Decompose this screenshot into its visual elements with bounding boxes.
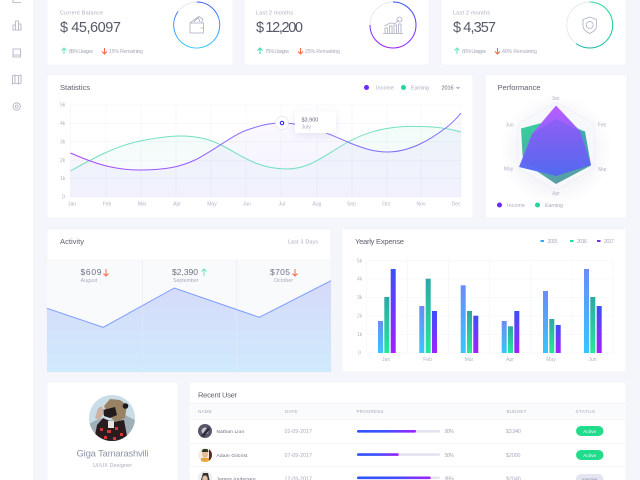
row: james andersen: [198, 471, 604, 480]
x axis labels: May: [207, 202, 217, 208]
income area: [70, 113, 461, 197]
x axis labels: [68, 202, 461, 208]
status pill: Active: [583, 453, 597, 458]
usage stats: 85% Usages: [69, 49, 93, 55]
row: nathan lion: 02-09-2017: [284, 429, 312, 435]
bars: jan: [378, 269, 396, 353]
status pill: [576, 426, 604, 436]
earning area: [70, 126, 461, 197]
revenue value: $ 12,200: [256, 20, 303, 36]
legend: [364, 85, 429, 92]
radar labels: Jan: [551, 96, 560, 102]
icon: book: [13, 49, 20, 57]
stat: september: [172, 267, 206, 284]
x axis labels: Aug: [313, 202, 322, 208]
x axis labels: Jul: [279, 202, 285, 208]
range label: Last 3 Days: [288, 240, 318, 246]
progress bar 90%: [357, 430, 440, 433]
panel: activity: [47, 229, 331, 372]
year selector: 2016: [442, 86, 454, 92]
x axis labels: Oct: [382, 202, 390, 208]
bars: feb: [419, 279, 437, 353]
row: nathan lion: [198, 424, 604, 438]
legend: 2016: [577, 239, 587, 245]
table header: NAME: [198, 409, 212, 414]
status pill: [576, 474, 604, 480]
year selector: [442, 86, 460, 92]
x axis labels: Apr: [173, 202, 181, 208]
balance value: $ 45,6097: [60, 20, 121, 36]
usage stats: [258, 48, 340, 55]
y axis labels: 3k: [60, 140, 66, 146]
profile photo: [89, 395, 135, 441]
bars: may: [543, 291, 561, 353]
row: adam gilcrist: $2000: [506, 453, 521, 459]
usage stats: 15% Remaining: [109, 49, 143, 55]
heading: performance: Performance: [498, 83, 540, 92]
bar chart: [357, 258, 613, 363]
y axis labels: 4k: [60, 121, 66, 127]
table header: STATUS: [576, 409, 596, 414]
x axis labels: Apr: [506, 357, 514, 363]
avatar: [198, 424, 212, 438]
x axis labels: Sep: [347, 202, 356, 208]
radar labels: Jun: [505, 122, 514, 128]
y axis labels: 2k: [357, 314, 363, 320]
x axis labels: Jun: [243, 202, 251, 208]
x axis labels: Nov: [417, 202, 426, 208]
panel: recent user table: [189, 382, 626, 480]
savings label: Last 2 months: [453, 10, 490, 16]
x axis labels: Feb: [423, 357, 432, 363]
row: nathan lion: Nathan Lion: [216, 429, 244, 435]
y axis labels: 1k: [357, 332, 363, 338]
line chart: [60, 102, 461, 208]
progress ring 85% with wallet icon: [174, 2, 220, 48]
sidebar: [0, 0, 33, 480]
y axis labels: 4k: [357, 276, 363, 282]
radar labels: May: [504, 166, 514, 172]
icon: map: [12, 75, 21, 84]
panel: statistics: [47, 75, 473, 218]
usage stats: [454, 48, 537, 55]
tooltip: [295, 112, 336, 133]
y axis labels: 1k: [60, 176, 66, 182]
earning polygon: [521, 119, 591, 184]
legend: [497, 202, 563, 209]
x axis labels: Dec: [452, 202, 461, 208]
savings value: $ 4,357: [453, 20, 496, 36]
usage stats: [62, 48, 143, 55]
stat: august: $609: [80, 267, 102, 277]
panel: last 2 months savings: [441, 0, 626, 65]
income polygon: [519, 106, 591, 176]
area chart: [47, 260, 331, 372]
radar labels: [504, 96, 607, 197]
y axis labels: [357, 258, 363, 356]
x axis labels: Jan: [382, 357, 390, 363]
legend: 2017: [604, 239, 614, 245]
y axis labels: 0: [62, 194, 65, 200]
heading: yearly expense: Yearly Expense: [355, 237, 404, 246]
data point marker: [276, 116, 288, 130]
bars: mar: [461, 285, 478, 353]
revenue label: Last 2 months: [256, 10, 293, 16]
profile name: Giga Tamarashvili: [76, 448, 148, 460]
row: adam gilcrist: 50%: [444, 453, 454, 459]
income line: [70, 113, 461, 170]
heading: recent user: Recent User: [198, 390, 237, 400]
tooltip: $3,900: [302, 118, 318, 124]
y axis labels: 5k: [60, 102, 66, 108]
radar chart: [500, 94, 612, 206]
avatar: [198, 471, 212, 480]
x axis labels: Jun: [588, 357, 597, 363]
x axis labels: Mar: [138, 202, 147, 208]
panel: yearly expense: [342, 229, 626, 372]
legend: Income: [376, 86, 394, 92]
y axis labels: 0: [358, 350, 361, 356]
y axis labels: 2k: [60, 158, 66, 164]
radar labels: Feb: [598, 122, 607, 128]
profile role: UI/UX Designer: [93, 463, 132, 469]
earning line: [70, 126, 461, 171]
row: adam gilcrist: [198, 448, 604, 462]
x axis labels: Mar: [465, 357, 474, 363]
stat: september: $2,390: [172, 267, 198, 277]
y axis labels: 3k: [357, 295, 363, 301]
bars: jun: [584, 269, 602, 353]
bars: apr: [502, 311, 519, 353]
avatar: [198, 448, 213, 462]
table header: PROGRESS: [356, 409, 384, 414]
legend: 2015: [548, 239, 558, 245]
heading: activity: Activity: [60, 237, 84, 246]
usage stats: 40% Remaining: [502, 49, 537, 55]
x axis labels: May: [546, 357, 556, 363]
panel: profile: [47, 382, 178, 480]
legend: [540, 239, 614, 245]
stat: october: [270, 267, 298, 284]
radar labels: Mar: [598, 167, 607, 173]
balance label: Current Balance: [60, 10, 103, 16]
radar labels: Apr: [552, 191, 560, 197]
progress bar 50%: [357, 453, 440, 456]
progress ring 60% with shield icon: [567, 2, 613, 48]
x axis labels: [382, 357, 597, 363]
stat: september: September: [173, 278, 199, 284]
stat: august: [80, 267, 108, 284]
row: adam gilcrist: Adam Gilcrist: [216, 453, 248, 459]
legend: Earning: [411, 86, 429, 92]
icon: line chart: [13, 0, 21, 2]
status pill: Active: [583, 429, 597, 434]
stat: august: August: [80, 278, 98, 284]
stat: october: October: [274, 278, 293, 284]
usage stats: 25% Remaining: [305, 49, 340, 55]
row: nathan lion: 90%: [444, 429, 454, 435]
table header: DATE: [285, 409, 298, 414]
panel: performance: [485, 75, 627, 218]
stat: october: $705: [270, 267, 290, 277]
y axis labels: 5k: [357, 258, 363, 264]
y axis labels: [60, 102, 66, 200]
tooltip: July: [302, 124, 311, 130]
table header: [189, 403, 626, 467]
progress ring 75% with growth icon: [370, 2, 416, 48]
progress bar 95%: [357, 476, 440, 479]
status pill: [576, 450, 604, 460]
table header: BUDGET: [506, 409, 527, 414]
usage stats: 60% Usages: [462, 49, 486, 55]
row: nathan lion: $3,940: [506, 429, 521, 435]
panel: current balance: [47, 0, 233, 65]
x axis labels: Feb: [103, 202, 112, 208]
panel: last 2 months revenue: [244, 0, 429, 65]
legend: Earning: [545, 203, 563, 209]
legend: Income: [507, 203, 525, 209]
row: adam gilcrist: 07-09-2017: [284, 453, 312, 459]
usage stats: 75% Usages: [265, 49, 289, 55]
icon: bar chart: [12, 21, 22, 30]
icon: settings: [13, 103, 20, 110]
x axis labels: Jan: [68, 202, 76, 208]
heading: statistics: Statistics: [60, 83, 90, 92]
